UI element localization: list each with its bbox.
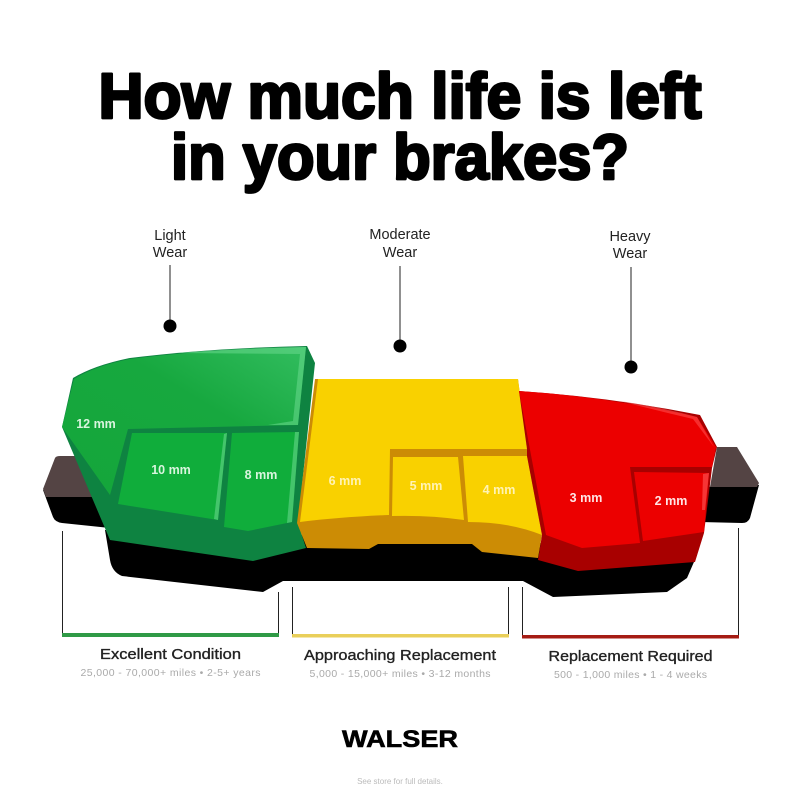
red pad base	[519, 391, 717, 571]
caption: replacement required	[548, 648, 712, 681]
title: How much life is left	[98, 60, 702, 132]
caption: excellent condition: Excellent Condition	[100, 646, 241, 663]
10 mm segment	[118, 433, 227, 520]
green pad base	[62, 346, 315, 561]
callout: moderate wear: Wear	[383, 245, 417, 261]
callout: light wear	[153, 228, 187, 332]
yellow labels: 6 mm	[329, 474, 361, 488]
black backing plate	[105, 530, 697, 597]
footnote: See store for full details.	[357, 777, 443, 786]
red section	[519, 391, 717, 571]
6 mm face	[300, 379, 527, 522]
green section: 10 mm	[151, 463, 191, 477]
5 mm segment	[392, 457, 464, 520]
callout: light wear: Light	[154, 228, 186, 244]
8 mm segment	[224, 432, 299, 531]
green section: 8 mm	[245, 468, 277, 482]
bracket: green	[62, 531, 279, 637]
callout: heavy wear	[609, 229, 651, 374]
caption: approaching replacement	[304, 647, 497, 680]
green labels: 12 mm	[76, 417, 116, 431]
caption: approaching replacement: Approaching Replacement	[304, 647, 497, 664]
right backing tab	[700, 447, 759, 523]
bracket: red	[522, 528, 739, 638]
brake pad illustration	[43, 346, 759, 597]
2 mm segment	[634, 472, 709, 541]
3 mm face	[519, 391, 716, 548]
bracket: yellow	[292, 587, 509, 638]
red labels: 3 mm	[570, 491, 602, 505]
green highlight	[175, 347, 306, 425]
callout: light wear: Wear	[153, 245, 187, 261]
left backing tab	[43, 456, 110, 528]
4 mm segment	[463, 456, 542, 535]
callout: heavy wear: Wear	[613, 246, 647, 262]
caption: replacement required: 500 - 1,000 miles • 1 - 4 weeks	[554, 669, 707, 681]
caption: excellent condition	[80, 646, 260, 679]
logo: walser: WALSER	[342, 726, 458, 753]
callout: moderate wear	[369, 227, 431, 352]
yellow section: 5 mm	[410, 479, 442, 493]
title: in your brakes?	[171, 121, 629, 193]
green section	[62, 346, 315, 561]
caption: excellent condition: 25,000 - 70,000+ miles • 2-5+ years	[80, 667, 260, 679]
caption: approaching replacement: 5,000 - 15,000+ miles • 3-12 months	[310, 668, 490, 680]
red section: 2 mm	[655, 494, 687, 508]
caption: replacement required: Replacement Required	[548, 648, 712, 665]
yellow pad base	[297, 379, 542, 558]
callout: heavy wear: Heavy	[609, 229, 651, 245]
callout: moderate wear: Moderate	[369, 227, 431, 243]
red highlight	[620, 401, 714, 447]
title	[98, 60, 702, 193]
yellow section: 4 mm	[483, 483, 515, 497]
yellow section	[297, 379, 542, 558]
12 mm face	[62, 347, 306, 495]
